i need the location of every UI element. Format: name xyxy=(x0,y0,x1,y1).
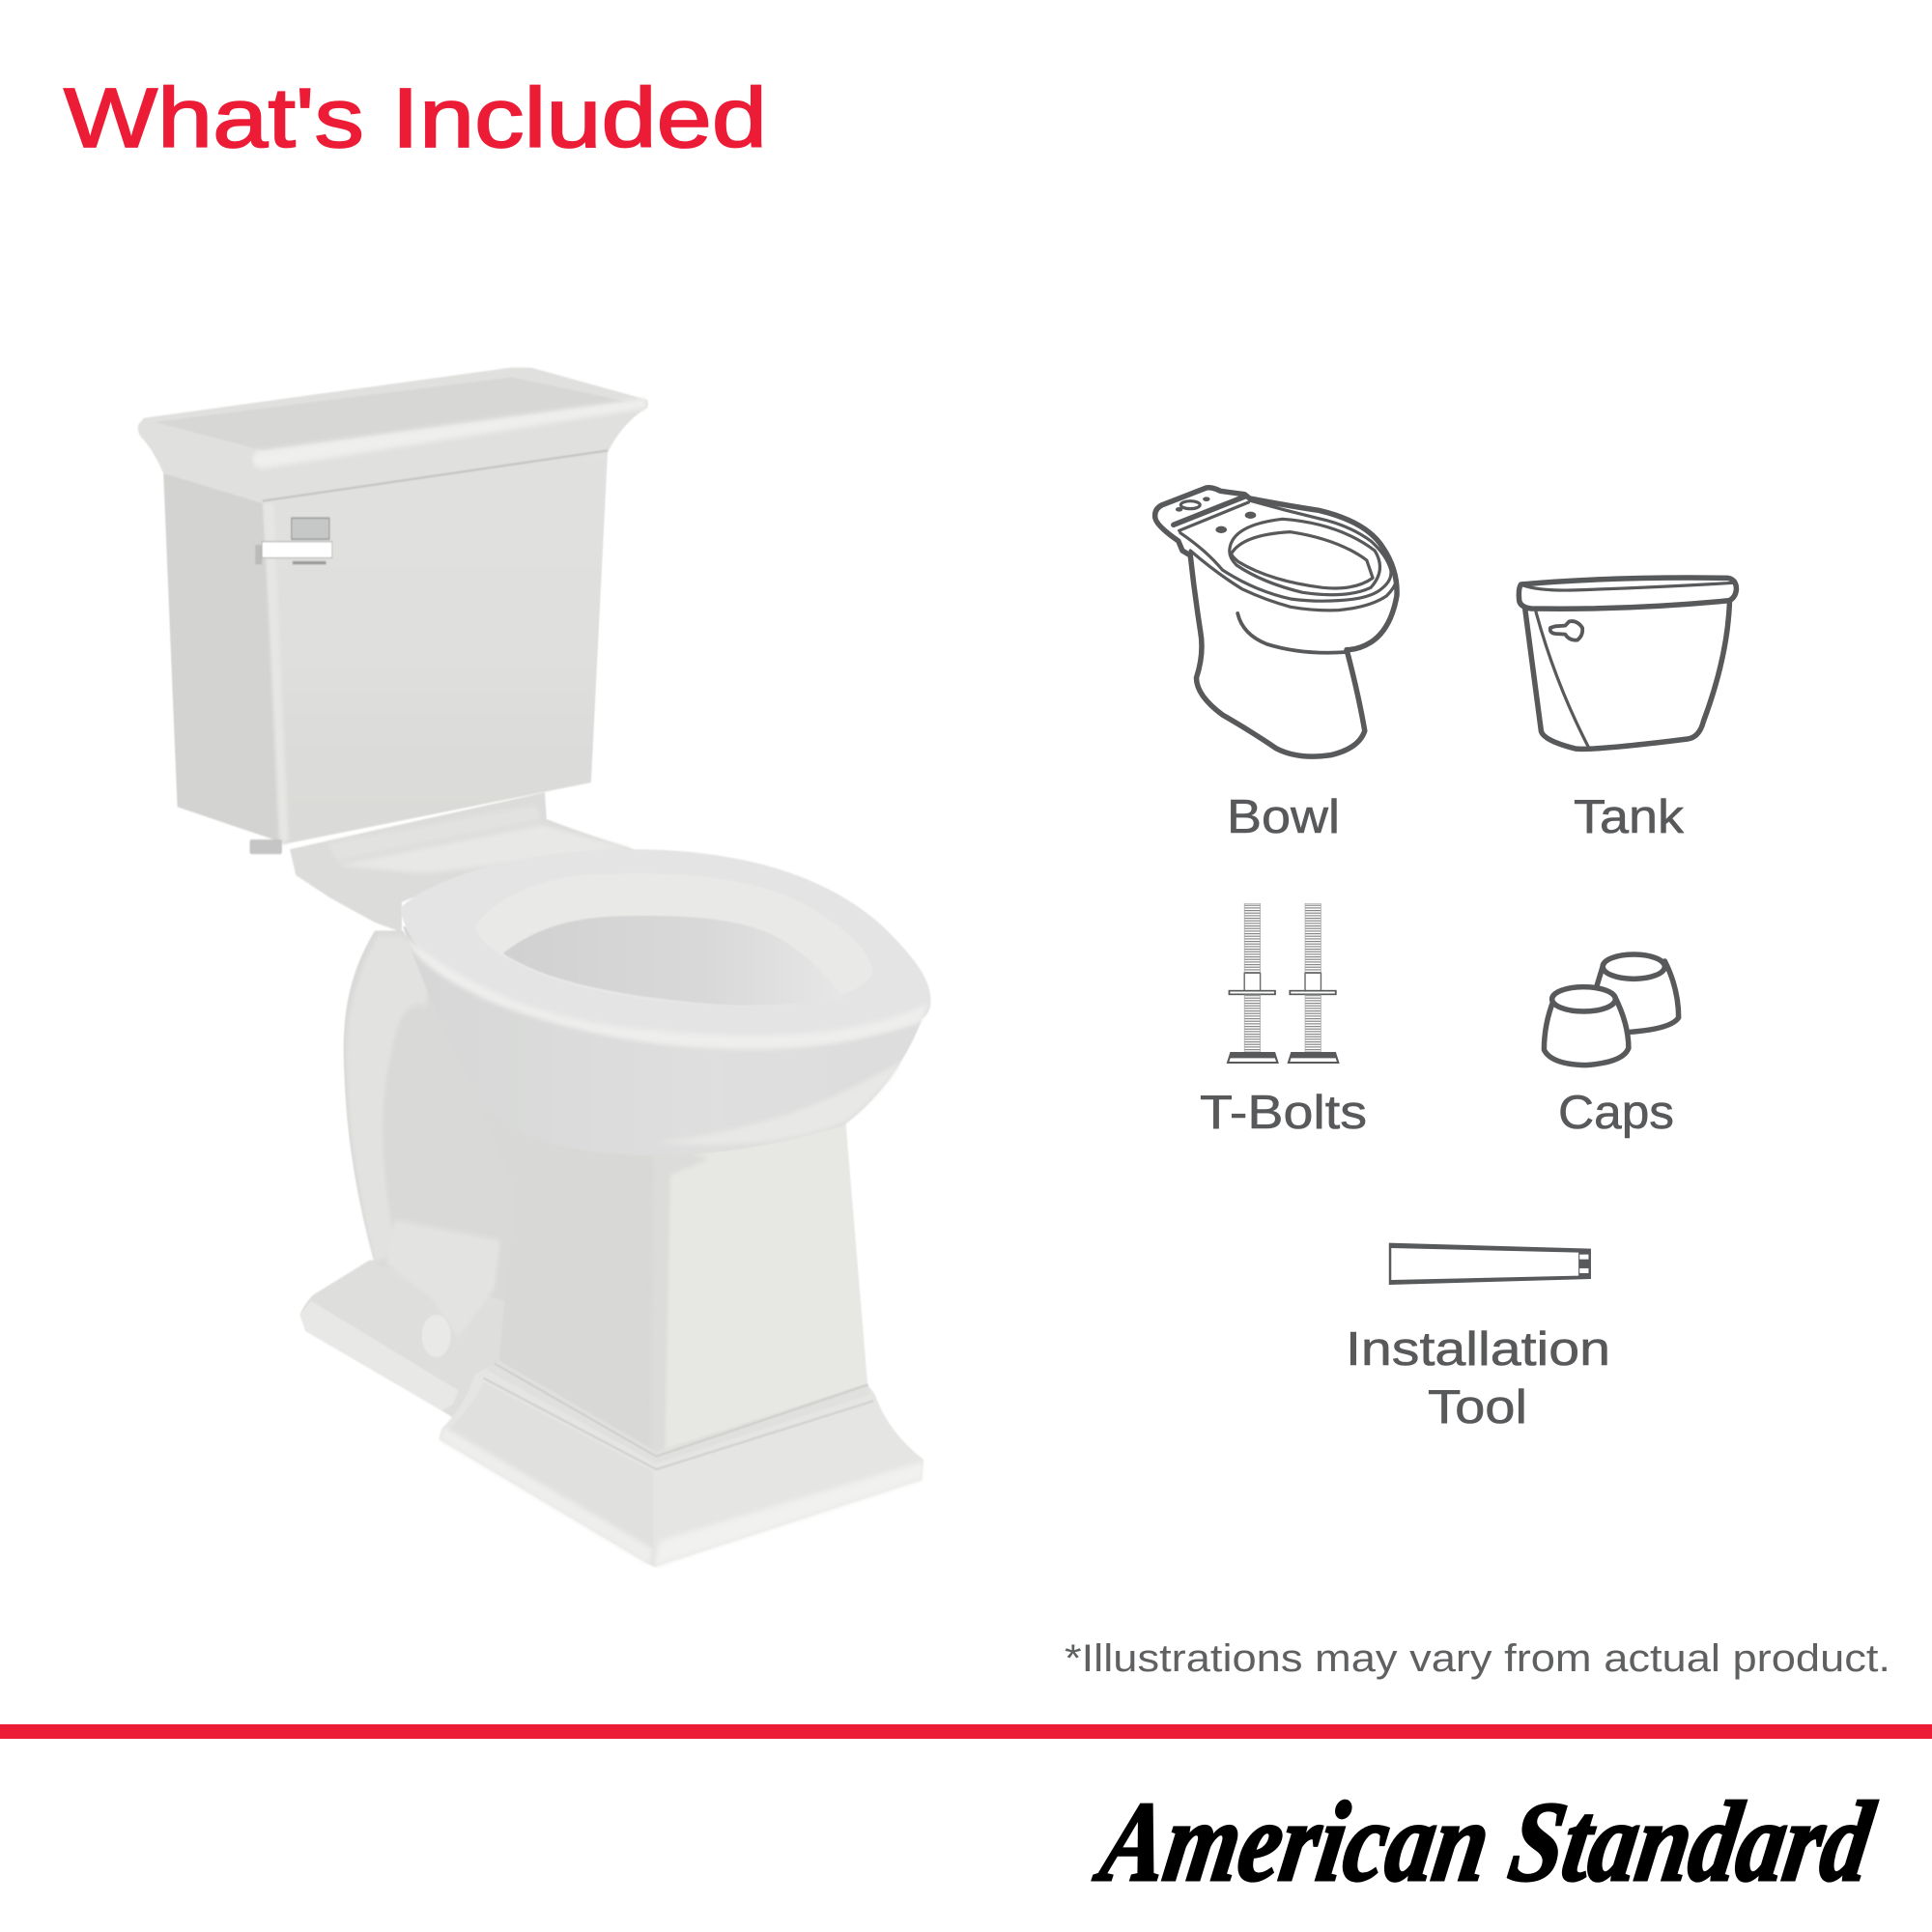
label: installation tool: Installation xyxy=(1346,1323,1610,1376)
toilet deck xyxy=(290,792,634,932)
label: installation tool: Tool xyxy=(1428,1381,1527,1434)
icon: t-bolts xyxy=(1228,903,1338,1063)
toilet pedestal left face xyxy=(481,1110,665,1460)
toilet flush lever xyxy=(255,518,332,564)
t-bolt right xyxy=(1289,903,1338,1063)
toilet base plinth xyxy=(439,1362,923,1567)
label: tank: Tank xyxy=(1574,791,1685,843)
toilet tank front face xyxy=(263,450,608,844)
toilet pedestal front face xyxy=(653,1120,867,1456)
footnote: *Illustrations may vary from actual product. xyxy=(1065,1637,1890,1680)
toilet bowl underside xyxy=(403,926,922,1155)
label: bowl: Bowl xyxy=(1227,791,1340,843)
t-bolt left xyxy=(1228,903,1277,1063)
icon: caps xyxy=(1544,954,1679,1065)
toilet tank lid xyxy=(138,367,648,503)
toilet rim xyxy=(400,849,931,1047)
toilet trapway xyxy=(344,930,531,1305)
toilet tank left face xyxy=(163,473,283,842)
toilet bowl opening xyxy=(475,873,873,1006)
label: caps: Caps xyxy=(1558,1087,1674,1139)
icon: installation tool xyxy=(1389,1243,1591,1285)
toilet flush bolt xyxy=(250,839,282,854)
icon: bowl xyxy=(1155,488,1397,756)
icon: tank xyxy=(1519,578,1736,749)
title: What's Included xyxy=(64,71,767,165)
label: t-bolts: T-Bolts xyxy=(1200,1087,1367,1139)
toilet rear foot xyxy=(299,1261,509,1421)
illustration: two-piece toilet xyxy=(138,367,931,1567)
red divider bar xyxy=(0,1724,1932,1739)
